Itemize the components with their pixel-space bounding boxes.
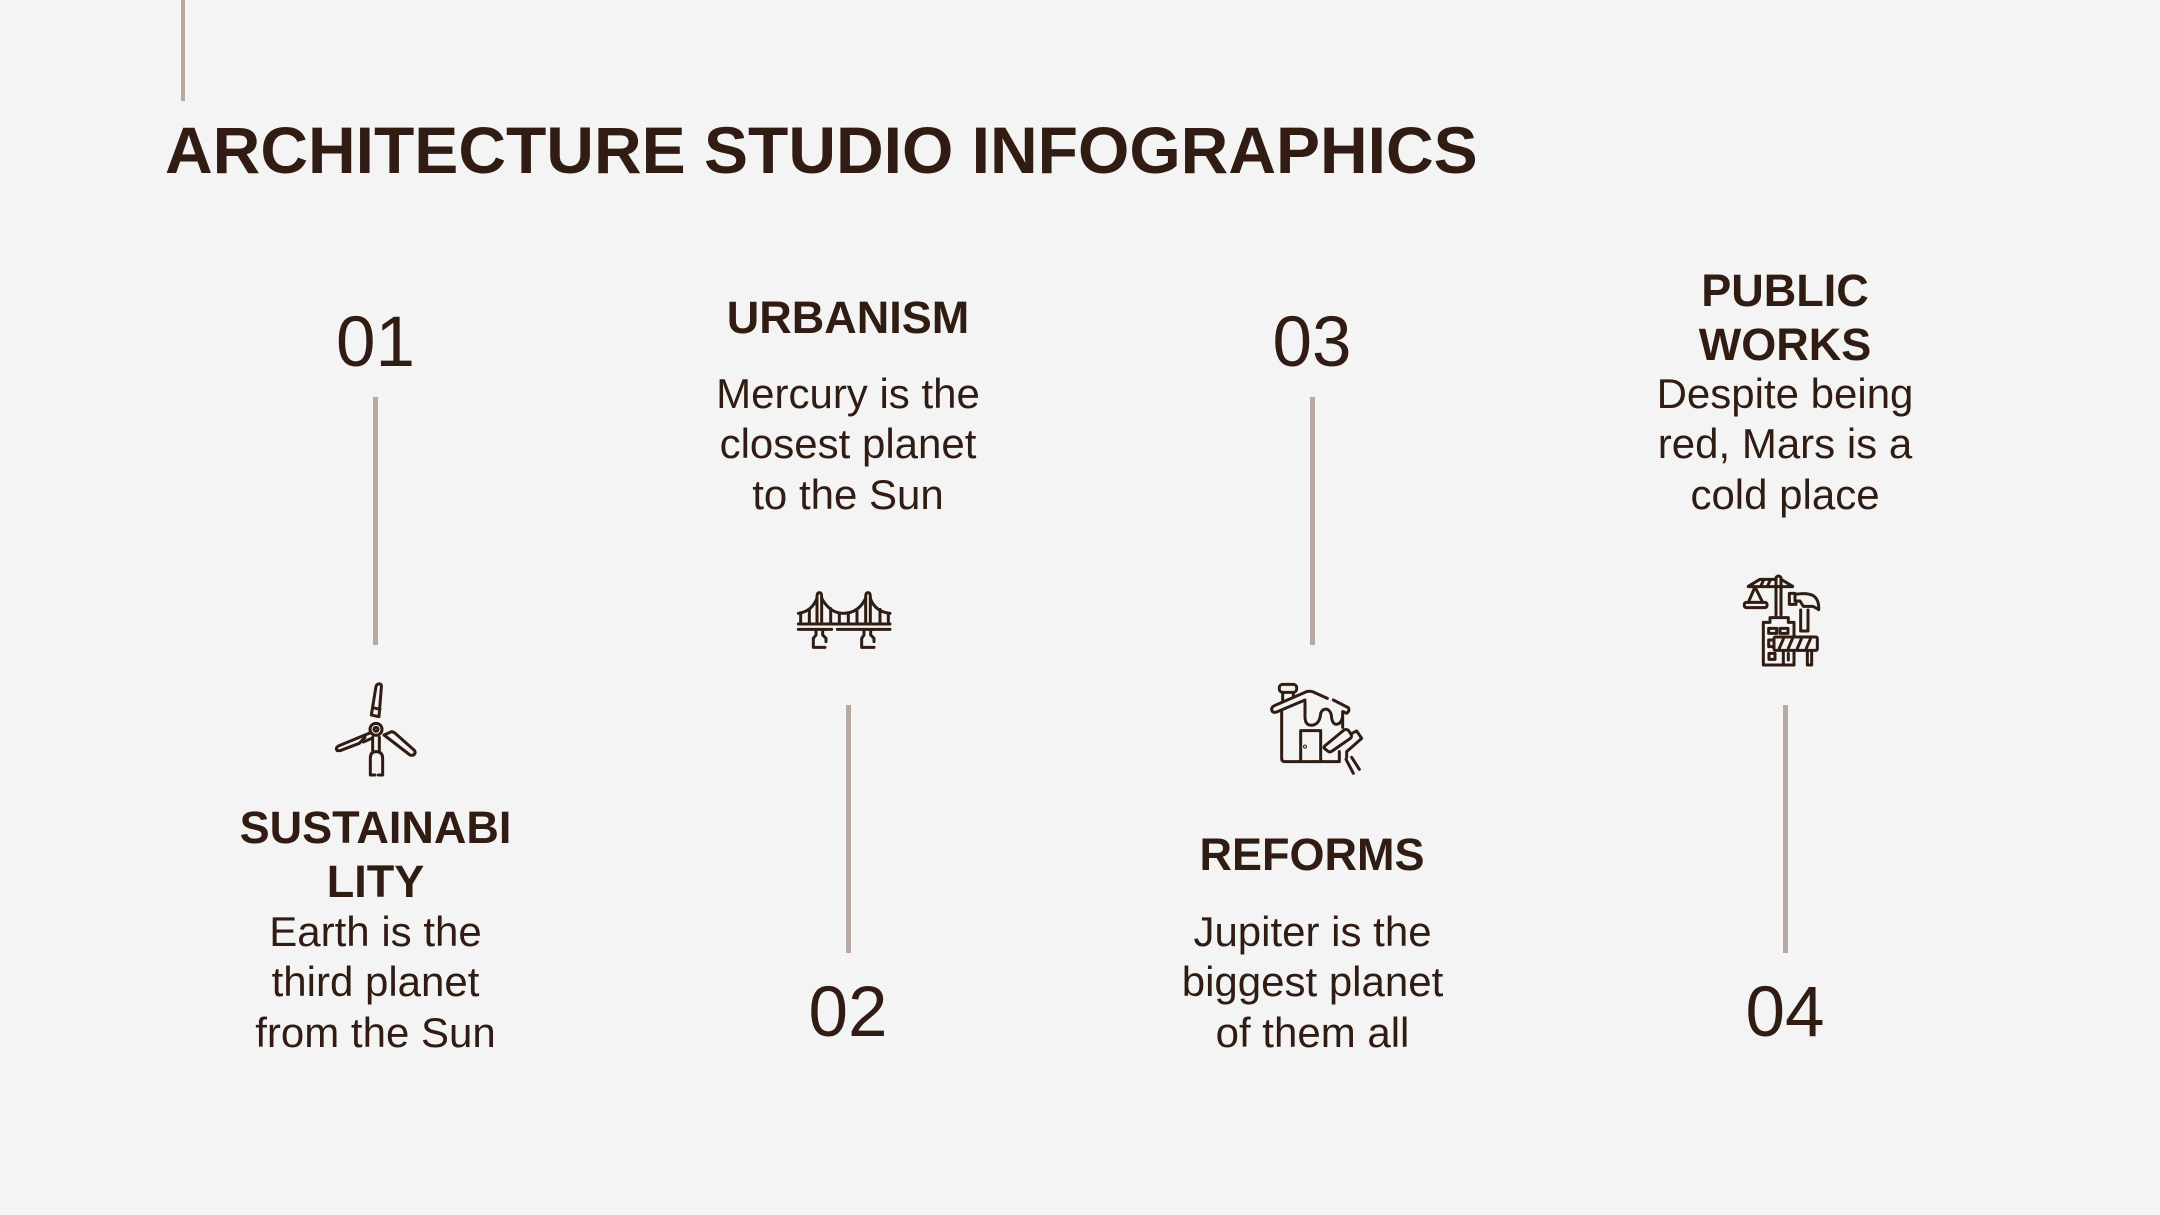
text: reforms: Jupiter is the	[1193, 908, 1432, 955]
heading: public works: PUBLIC	[1701, 265, 1869, 316]
heading: sustainability	[240, 802, 511, 907]
text: public works	[1657, 370, 1913, 518]
heading: public works: WORKS	[1699, 319, 1871, 370]
connector line 02	[846, 705, 850, 953]
text: urbanism	[716, 370, 980, 518]
number 01: 01	[336, 303, 415, 382]
text: sustainability: from the Sun	[255, 1009, 496, 1056]
icon: construction crane, hammer and barrier	[1742, 574, 1820, 666]
heading: reforms: REFORMS	[1200, 829, 1424, 880]
number 03: 03	[1272, 303, 1351, 382]
text: urbanism: to the Sun	[752, 471, 944, 518]
connector line 04	[1783, 705, 1788, 953]
connector line 01	[373, 397, 378, 645]
icon: house with paint roller	[1270, 682, 1364, 775]
text: sustainability: Earth is the	[269, 908, 482, 955]
text: reforms: biggest planet	[1182, 958, 1443, 1005]
text: public works: Despite being	[1657, 370, 1913, 417]
text: urbanism: Mercury is the	[716, 370, 980, 417]
heading: sustainability: SUSTAINABI	[240, 802, 511, 853]
icon: wind turbine	[334, 682, 417, 776]
title: ARCHITECTURE STUDIO INFOGRAPHICS	[165, 113, 1478, 187]
icon: bridge	[796, 591, 892, 649]
heading: public works	[1698, 265, 1871, 370]
connector line 03	[1310, 397, 1314, 645]
text: urbanism: closest planet	[720, 420, 976, 467]
number 04: 04	[1746, 973, 1824, 1052]
text: reforms	[1182, 908, 1443, 1056]
number 02: 02	[808, 973, 887, 1052]
heading: urbanism: URBANISM	[727, 292, 969, 343]
text: sustainability: third planet	[272, 958, 479, 1005]
text: public works: red, Mars is a	[1658, 420, 1912, 467]
top accent line	[180, 0, 185, 101]
heading: sustainability: LITY	[327, 856, 424, 907]
text: public works: cold place	[1690, 471, 1880, 518]
text: sustainability	[255, 908, 496, 1056]
text: reforms: of them all	[1216, 1009, 1409, 1056]
